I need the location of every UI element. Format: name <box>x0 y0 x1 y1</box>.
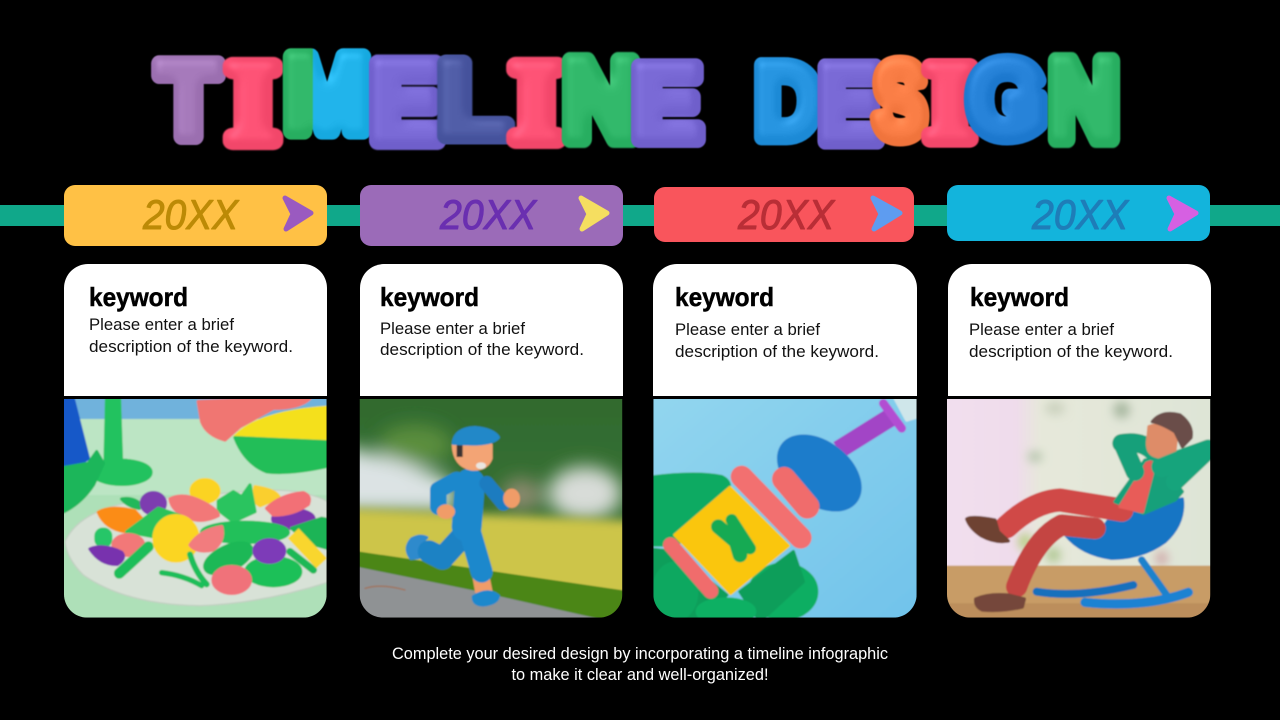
title: clay letters TIMELINE DESIGN: I <box>228 39 278 166</box>
title: clay letters TIMELINE DESIGN: M <box>284 34 370 155</box>
description 2: description of the keyword. <box>380 341 584 359</box>
arrow 1 <box>285 198 311 229</box>
year pill 4: 20XX <box>1031 191 1130 238</box>
year pill 4 <box>947 185 1210 241</box>
footer caption: to make it clear and well-organized! <box>512 666 768 684</box>
description 1: Please enter a brief <box>89 316 234 334</box>
description 2: Please enter a brief <box>380 320 525 338</box>
heading: keyword 3: keyword <box>675 282 774 312</box>
timeline band <box>0 205 1280 226</box>
panel: card 4 <box>948 264 1211 396</box>
description 4: Please enter a brief <box>969 321 1114 339</box>
title: clay letters TIMELINE DESIGN: I <box>512 39 561 165</box>
panel: card 1 <box>64 264 327 396</box>
plate <box>65 490 340 606</box>
year pill 3: 20XX <box>737 191 836 238</box>
image: clay runner <box>360 399 622 618</box>
title: clay letters TIMELINE DESIGN: T <box>158 41 219 159</box>
title: clay letters TIMELINE DESIGN: N <box>1049 38 1119 164</box>
heading: keyword 1: keyword <box>89 282 188 312</box>
description 3: Please enter a brief <box>675 321 820 339</box>
image: clay man relaxing in rocking chair <box>947 399 1210 618</box>
footer caption: Complete your desired design by incorporating a timeline infographic <box>392 645 888 663</box>
heading: keyword 4: keyword <box>970 282 1069 312</box>
year pill 1 <box>64 185 327 246</box>
arrow 2 <box>581 198 607 229</box>
image: clay syringe <box>653 399 917 618</box>
title: clay letters TIMELINE DESIGN: S <box>874 41 926 160</box>
runner figure <box>407 428 518 605</box>
year pill 3 <box>654 187 914 242</box>
arrow 3 <box>873 198 900 229</box>
description 1 <box>89 316 293 356</box>
panel: card 2 <box>360 264 623 396</box>
description 2 <box>380 320 584 359</box>
title: clay letters TIMELINE DESIGN: G <box>968 40 1046 160</box>
title: clay letters TIMELINE DESIGN <box>158 34 1119 166</box>
man <box>967 413 1208 610</box>
title: clay letters TIMELINE DESIGN: D <box>755 43 821 159</box>
arrow 4 <box>1169 198 1196 229</box>
title: clay letters TIMELINE DESIGN: E <box>632 45 702 163</box>
image: clay food plate <box>64 399 327 618</box>
title: clay letters TIMELINE DESIGN: I <box>927 41 973 163</box>
description 4 <box>969 321 1173 361</box>
year pill 2 <box>360 185 623 246</box>
title: clay letters TIMELINE DESIGN: E <box>819 44 881 164</box>
description 4: description of the keyword. <box>969 343 1173 361</box>
chair <box>1037 499 1188 604</box>
footer caption <box>392 645 888 684</box>
year pill 1: 20XX <box>142 191 240 238</box>
description 1: description of the keyword. <box>89 338 293 356</box>
title: clay letters TIMELINE DESIGN: L <box>439 40 509 159</box>
year pill 2: 20XX <box>439 191 538 238</box>
title: clay letters TIMELINE DESIGN: E <box>370 41 442 166</box>
description 3 <box>675 321 879 361</box>
title: clay letters TIMELINE DESIGN: N <box>563 37 639 164</box>
heading: keyword 2: keyword <box>380 282 479 312</box>
description 3: description of the keyword. <box>675 343 879 361</box>
panel: card 3 <box>653 264 917 396</box>
